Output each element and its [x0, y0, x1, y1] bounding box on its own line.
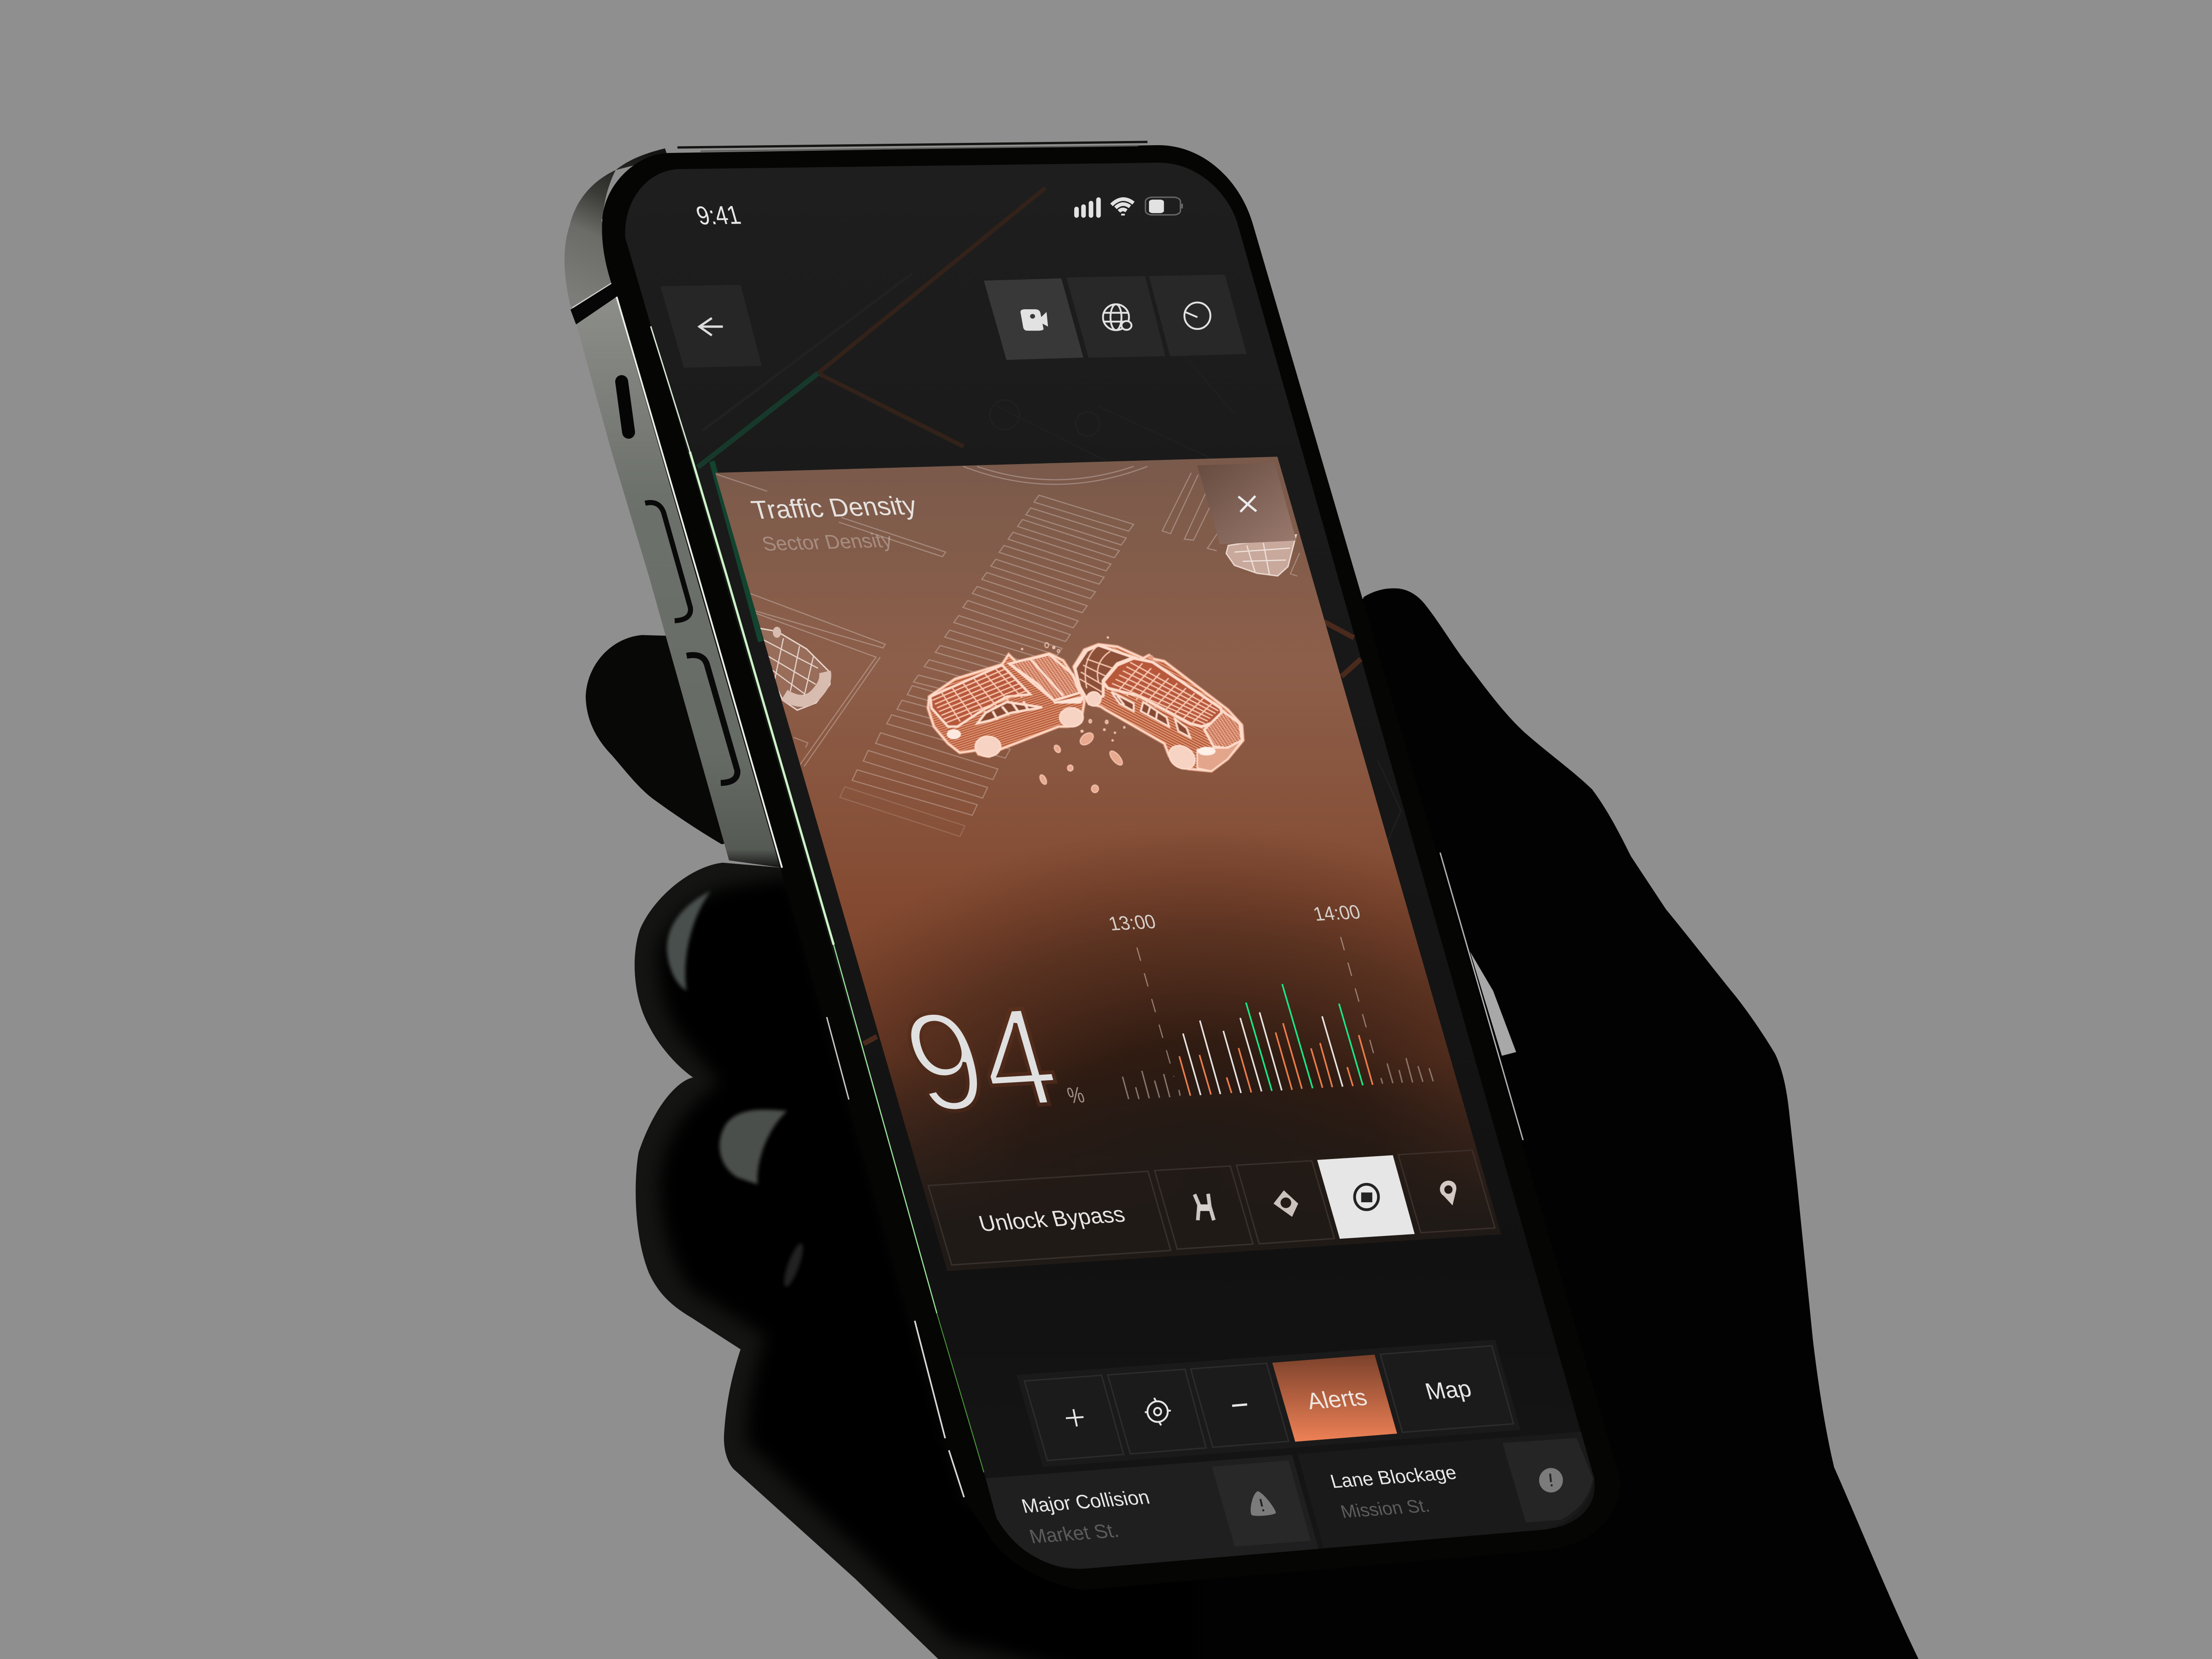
bezel outer highlights [617, 142, 1523, 1497]
fingernail upper [667, 891, 711, 991]
warning icon tile [1212, 1460, 1311, 1547]
action row [928, 1150, 1495, 1265]
info icon tile [1502, 1438, 1593, 1523]
parked car left [756, 627, 830, 710]
headlight [1198, 747, 1216, 755]
camera button [984, 278, 1083, 360]
history button [1149, 275, 1247, 356]
zoom out button [1191, 1363, 1288, 1447]
card location: Mission St. [1338, 1495, 1432, 1522]
button: route icon [1154, 1166, 1253, 1249]
big value 94: 94 [888, 978, 1074, 1141]
headlight [947, 729, 961, 739]
antenna band [571, 283, 617, 324]
map label: Map [1422, 1376, 1474, 1405]
faint bars [1123, 1058, 1433, 1099]
wheels [975, 736, 1000, 757]
hood mesh [1009, 654, 1080, 700]
button: active target [1317, 1155, 1415, 1239]
map tab [1380, 1346, 1513, 1432]
roof mesh [1103, 658, 1223, 727]
lower frame segment [577, 297, 782, 868]
volume up button [645, 503, 690, 621]
bar chart [1123, 937, 1433, 1099]
status icons [1077, 197, 1183, 216]
car two: hatchback [1074, 644, 1243, 771]
icon: warning triangle [1251, 1491, 1276, 1516]
icon: clock [1184, 302, 1211, 329]
panel background [691, 438, 1521, 1290]
alert card: lane blockage [1297, 1432, 1594, 1548]
hand: palm behind the phone [938, 588, 1918, 1659]
card title: Major Collision [1019, 1486, 1152, 1518]
screen edge glint [651, 326, 984, 1472]
crosswalk and street lines [716, 466, 1300, 836]
card title: Lane Blockage [1328, 1461, 1459, 1492]
wheels [1165, 743, 1199, 771]
phone screen [625, 163, 1595, 1569]
phone bezel [602, 145, 1620, 1590]
front mesh [1204, 711, 1242, 748]
phone metal frame [565, 148, 782, 868]
icon: battery [1146, 197, 1183, 215]
map road lines [698, 188, 1410, 1044]
back button [660, 285, 762, 368]
debris [1021, 637, 1125, 793]
hand: fingers wrapping the phone [635, 863, 1198, 1659]
green bars [1246, 984, 1363, 1091]
orange bars [1179, 1023, 1373, 1096]
button: unlock bypass [928, 1171, 1171, 1265]
alert card: major collision [986, 1455, 1318, 1569]
panel title: Traffic Density [748, 491, 920, 525]
icon: wifi [1112, 199, 1134, 216]
icon: signal [1077, 200, 1099, 216]
windows [977, 702, 1042, 724]
close button [1197, 463, 1296, 544]
map controls [1017, 1340, 1521, 1467]
button: pin icon [1398, 1150, 1495, 1233]
time label 14:00: 14:00 [1311, 901, 1363, 925]
icon: back arrow [700, 318, 723, 335]
icon: info circle [1539, 1468, 1563, 1493]
icon: camera [1020, 309, 1048, 331]
parked car top right [1226, 535, 1296, 576]
icon: globe search [1103, 304, 1131, 330]
locate button [1108, 1369, 1206, 1454]
card location: Market St. [1027, 1519, 1121, 1548]
hand: index finger behind phone [586, 635, 793, 844]
globe button [1066, 276, 1165, 358]
rear window [1075, 645, 1134, 704]
roof mesh [930, 665, 1030, 727]
fingernail lower [719, 1110, 787, 1184]
icon: close [1238, 496, 1256, 512]
button: diamond icon [1236, 1161, 1335, 1244]
sliver of background between hand and phone [1470, 952, 1516, 1056]
time guides [1137, 937, 1377, 1077]
white bars [1183, 1012, 1343, 1095]
car one: sedan [928, 653, 1084, 757]
unlock bypass label: Unlock Bypass [976, 1202, 1128, 1236]
zoom in button [1024, 1375, 1124, 1460]
crashed cars illustration [928, 637, 1243, 793]
panel: traffic density [691, 438, 1521, 1290]
windows [1112, 692, 1190, 737]
panel subtitle: Sector Density [759, 529, 894, 555]
alerts tab [1272, 1355, 1397, 1441]
status bar time: 9:41 [693, 201, 744, 230]
alerts label: Alerts [1304, 1384, 1370, 1414]
percent sign: % [1065, 1083, 1087, 1108]
fingernail third [781, 1241, 806, 1288]
upper frame segment [565, 148, 668, 308]
mute switch [622, 382, 629, 432]
car body [928, 653, 1084, 757]
time label 13:00: 13:00 [1106, 911, 1158, 935]
volume down button [687, 655, 737, 783]
car body [1074, 644, 1243, 771]
